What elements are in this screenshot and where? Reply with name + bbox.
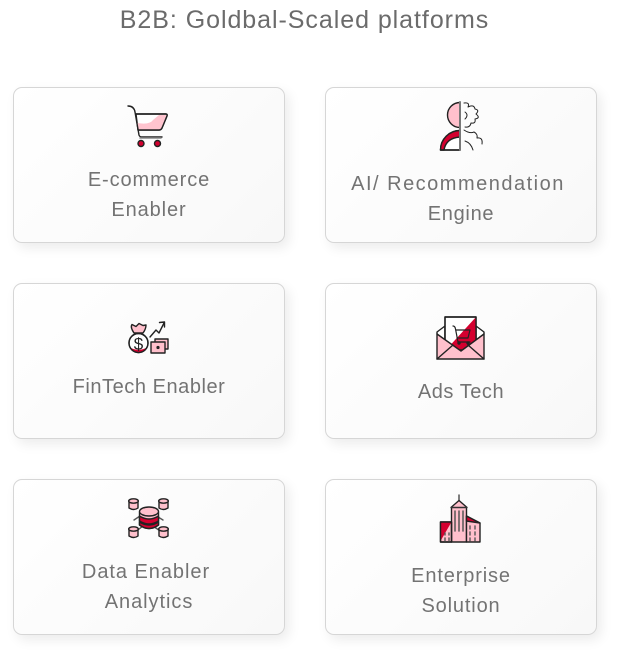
icon: money bag and cash: $ <box>134 334 144 354</box>
label: E-commerce Enabler: Enabler <box>111 199 187 221</box>
label: Data Enabler Analytics: Data Enabler <box>82 561 210 583</box>
icon: money bag and cash <box>129 322 168 354</box>
label: Ads Tech: Ads Tech <box>418 381 504 403</box>
panel: Ads Tech <box>325 283 597 439</box>
icon: envelope with cart <box>437 317 484 359</box>
label: AI/ Recommendation Engine: Engine <box>428 203 494 225</box>
panel: AI / Recommendation Engine <box>325 87 597 243</box>
label: Enterprise Solution <box>411 565 511 617</box>
icon: office building <box>440 495 480 542</box>
label: FinTech Enabler: FinTech Enabler <box>73 376 225 398</box>
label: AI/ Recommendation Engine <box>351 173 565 225</box>
title: B2B: Goldbal-Scaled platforms <box>120 6 489 34</box>
label: Enterprise Solution: Solution <box>421 595 501 617</box>
icon: AI head with gears <box>440 102 482 150</box>
panel: FinTech Enabler <box>13 283 285 439</box>
label: E-commerce Enabler <box>88 169 210 221</box>
panel: Enterprise Solution <box>325 479 597 635</box>
label: E-commerce Enabler: E-commerce <box>88 169 210 191</box>
label: Data Enabler Analytics <box>82 561 210 613</box>
icon: shopping cart <box>128 106 167 146</box>
panel: Data Enabler Analytics <box>13 479 285 635</box>
icon: database network <box>129 499 168 538</box>
label: Enterprise Solution: Enterprise <box>411 565 511 587</box>
label: AI/ Recommendation Engine: AI/ Recommendation <box>351 173 565 195</box>
panel: E-commerce Enabler <box>13 87 285 243</box>
label: Data Enabler Analytics: Analytics <box>105 591 193 613</box>
